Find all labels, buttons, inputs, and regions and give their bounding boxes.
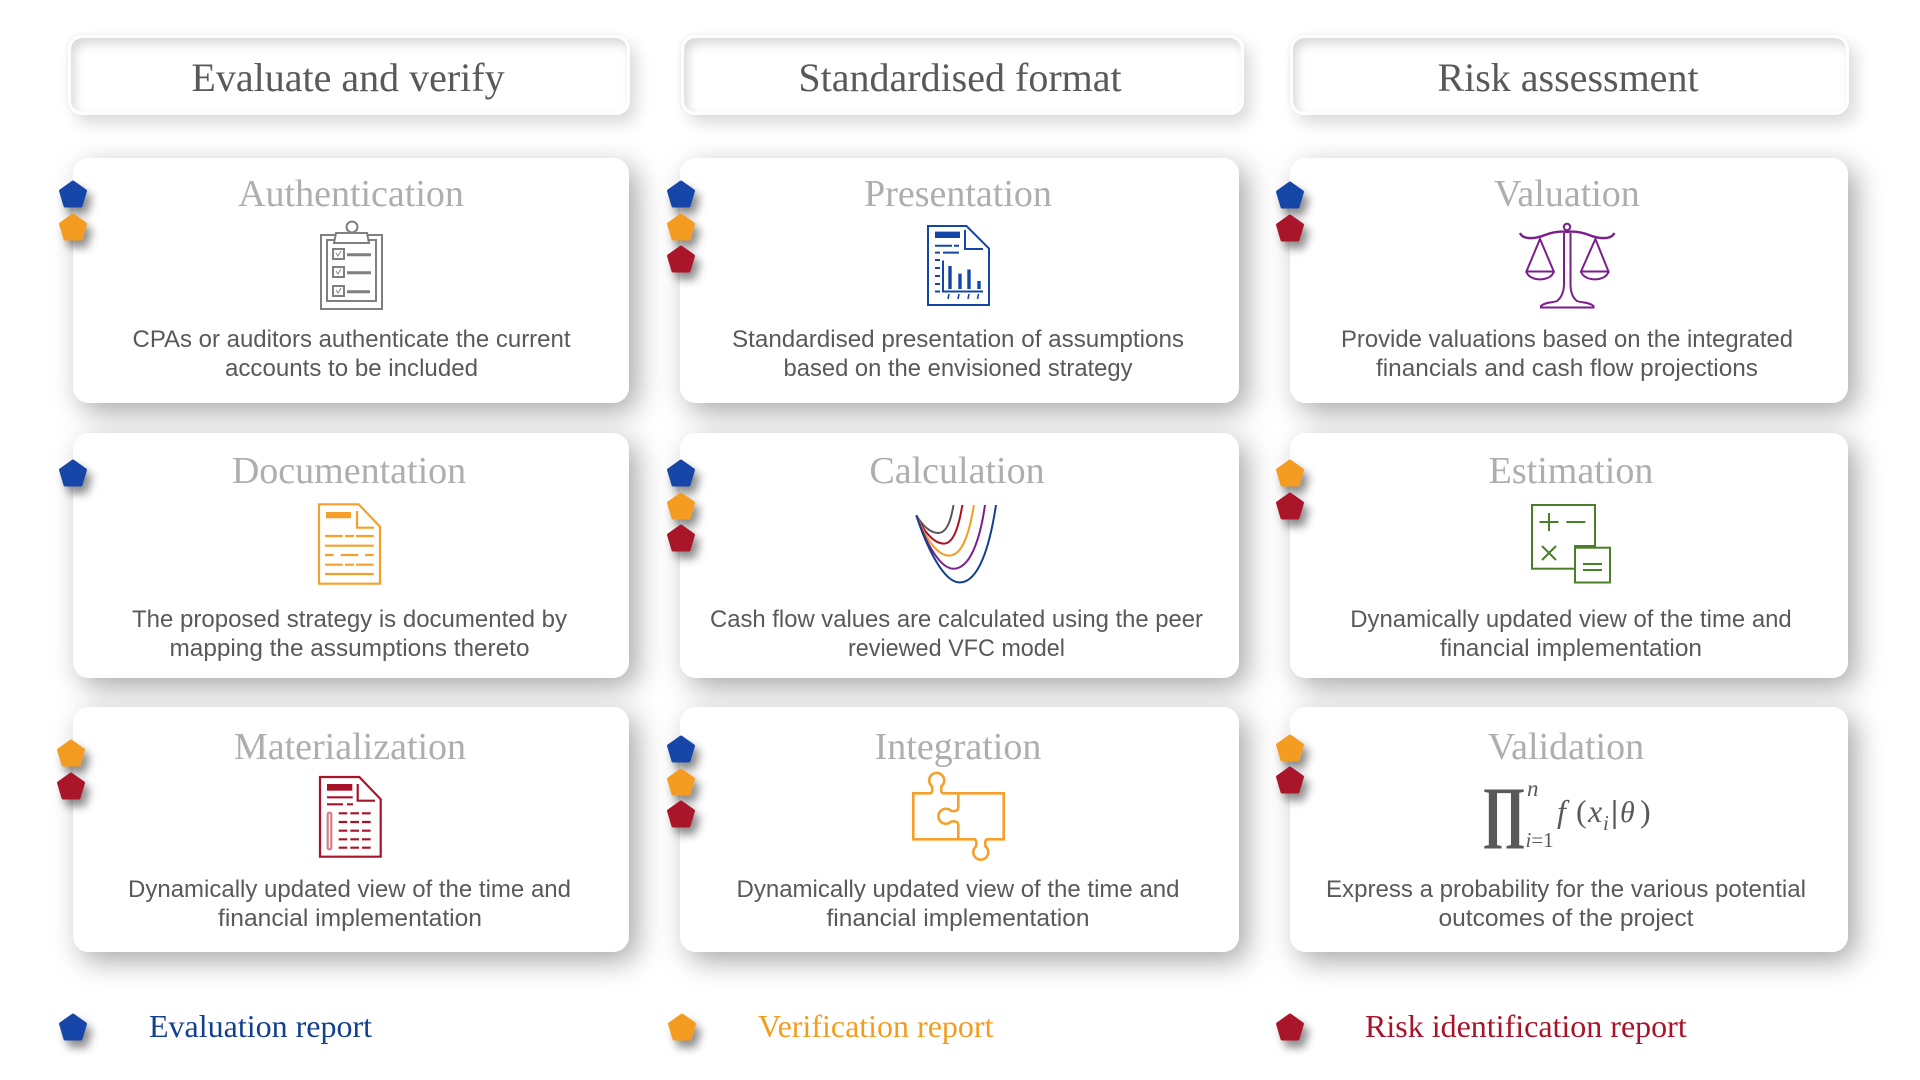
description	[1326, 876, 1806, 932]
icon: blue chart document	[928, 226, 989, 305]
formula: f	[1557, 793, 1570, 829]
panel: Presentation	[668, 158, 1239, 403]
description	[132, 606, 567, 662]
formula	[1482, 773, 1651, 852]
badges	[1278, 736, 1302, 792]
description: Dynamically updated view of the time and	[128, 876, 571, 903]
badges	[60, 182, 86, 239]
card title: Materialization	[234, 726, 466, 768]
description: Dynamically updated view of the time and	[736, 876, 1180, 903]
formula: (	[1576, 793, 1587, 829]
description	[710, 606, 1203, 662]
formula: x	[1587, 793, 1602, 829]
heading: Standardised format	[681, 35, 1244, 115]
panel: Estimation	[1278, 433, 1848, 678]
card title: Documentation	[232, 450, 466, 492]
legend: Evaluation report: Evaluation report	[149, 1008, 372, 1044]
icon: red table document	[320, 777, 381, 857]
formula: |	[1611, 793, 1618, 829]
formula: n	[1527, 776, 1538, 801]
icon: clipboard checklist	[321, 222, 382, 309]
description	[132, 326, 571, 382]
description: financial implementation	[218, 905, 482, 932]
legend: Verification report: Verification report	[758, 1008, 994, 1044]
heading: Evaluate and verify	[68, 35, 630, 115]
description: Provide valuations based on the integrated	[1341, 326, 1793, 353]
description: financial implementation	[1440, 635, 1702, 662]
icon: orange document	[319, 504, 380, 584]
badges	[58, 741, 84, 798]
card title: Calculation	[869, 450, 1045, 492]
heading: Risk assessment: Risk assessment	[1437, 55, 1699, 100]
formula: i	[1603, 811, 1609, 835]
card title: Authentication	[238, 173, 464, 215]
badges	[668, 182, 694, 271]
description: Cash flow values are calculated using the peer	[710, 606, 1203, 633]
description: Standardised presentation of assumptions	[732, 326, 1184, 353]
heading: Standardised format: Standardised format	[798, 55, 1122, 100]
panel: Materialization	[58, 707, 629, 952]
panel: Authentication	[60, 158, 629, 403]
panel: Valuation	[1278, 158, 1848, 403]
heading: Evaluate and verify: Evaluate and verify	[191, 55, 505, 100]
description: CPAs or auditors authenticate the current	[132, 326, 571, 353]
formula: ∏	[1482, 773, 1526, 849]
formula: θ	[1620, 796, 1635, 829]
description: financial implementation	[826, 905, 1090, 932]
formula: i=1	[1526, 828, 1554, 852]
formula: )	[1640, 793, 1651, 829]
description: Dynamically updated view of the time and	[1350, 606, 1792, 633]
heading: Risk assessment	[1290, 35, 1849, 115]
description: The proposed strategy is documented by	[132, 606, 567, 633]
badge	[60, 461, 86, 485]
panel: Documentation	[60, 433, 629, 678]
badges	[1278, 183, 1302, 240]
card title: Validation	[1488, 726, 1644, 768]
panel: Validation	[1278, 707, 1848, 952]
icon: puzzle pieces	[913, 773, 1004, 860]
icon: nested curves	[916, 505, 996, 582]
description	[1341, 326, 1793, 382]
badges	[1278, 461, 1302, 518]
legend: Risk identification report: Risk identification report	[1365, 1008, 1687, 1044]
card title: Estimation	[1489, 450, 1653, 492]
badges	[668, 461, 694, 550]
description: mapping the assumptions thereto	[170, 635, 530, 662]
badges	[668, 737, 694, 826]
description: financials and cash flow projections	[1376, 355, 1758, 382]
panel: Calculation	[668, 433, 1239, 678]
description: outcomes of the project	[1438, 905, 1694, 932]
card title: Presentation	[864, 173, 1052, 215]
description	[1350, 606, 1792, 662]
description: Express a probability for the various potential	[1326, 876, 1806, 903]
description	[128, 876, 571, 932]
description: accounts to be included	[225, 355, 478, 382]
card title: Valuation	[1494, 173, 1640, 215]
description: reviewed VFC model	[848, 635, 1065, 662]
card title: Integration	[875, 726, 1041, 768]
description	[732, 326, 1184, 382]
icon: balance scales	[1520, 224, 1614, 308]
icon: calculator operators	[1532, 505, 1610, 582]
panel: Integration	[668, 707, 1239, 952]
description	[736, 876, 1180, 932]
description: based on the envisioned strategy	[784, 355, 1132, 382]
